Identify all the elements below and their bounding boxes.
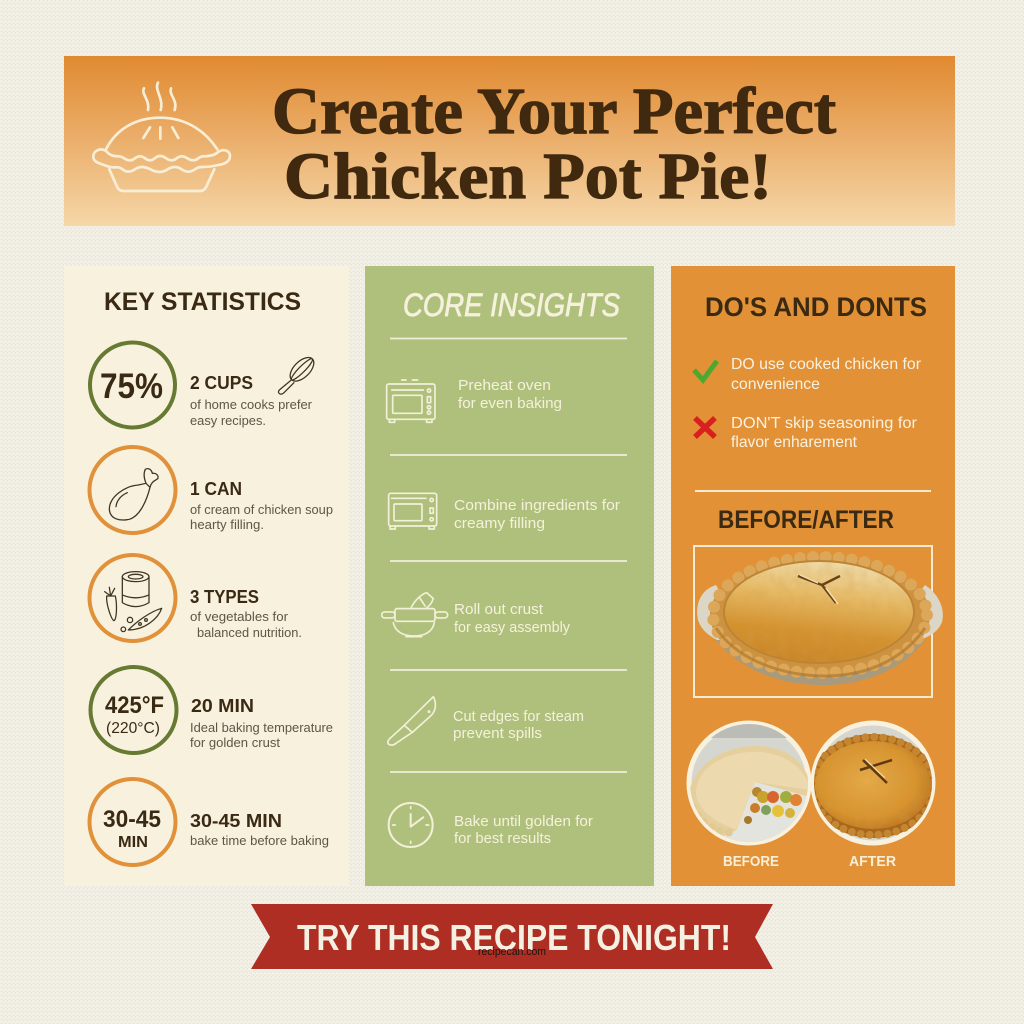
icon: rolling pin and bowl xyxy=(382,593,448,637)
insight: preheat oven: for even baking xyxy=(458,395,562,412)
insight: bake until golden xyxy=(389,803,593,847)
title: Create Your Perfect xyxy=(272,75,836,148)
heading: key statistics: KEY STATISTICS xyxy=(104,288,301,316)
stat: 30-45 min: 30-45 MIN xyxy=(190,811,282,831)
don't text: DON'T skip seasoning for xyxy=(731,415,918,432)
do text: DO use cooked chicken for xyxy=(731,356,922,373)
header banner xyxy=(64,56,955,226)
stat: 30-45 min: MIN xyxy=(118,834,148,851)
panel: do's and don'ts xyxy=(671,266,955,886)
stat: 425F: for golden crust xyxy=(190,736,281,750)
stat: 75% xyxy=(90,342,318,428)
icon: toaster oven xyxy=(389,493,437,529)
stat: 75%: of home cooks prefer xyxy=(190,398,312,412)
stat: 425F xyxy=(90,667,333,753)
panel: key statistics xyxy=(64,266,349,886)
heading: do's and donts: DO'S AND DONTS xyxy=(705,292,927,322)
stat: 75%: 2 CUPS xyxy=(190,373,253,393)
insight: cut edges xyxy=(388,697,584,745)
icon: cross mark xyxy=(695,418,715,437)
don't text: flavor enharement xyxy=(731,434,858,451)
insight: cut edges: Cut edges for steam xyxy=(453,708,584,725)
stat: 1 can: 1 CAN xyxy=(190,479,242,499)
heading: before/after: BEFORE/AFTER xyxy=(718,506,894,534)
insight: combine ingredients xyxy=(389,493,620,532)
image frame: finished pie xyxy=(694,546,943,697)
do text xyxy=(731,356,922,393)
icon: steaming pie xyxy=(93,83,230,191)
label: after: AFTER xyxy=(849,853,896,870)
stat: 3 types: balanced nutrition. xyxy=(197,626,302,640)
call to action ribbon: TRY THIS RECIPE TONIGHT! xyxy=(297,917,731,958)
icon: check mark xyxy=(694,361,717,380)
insight: roll out crust: Roll out crust xyxy=(454,601,544,618)
stat: 1 can: of cream of chicken soup xyxy=(190,503,333,517)
icon: can and vegetables xyxy=(105,572,162,632)
stat: 425F: Ideal baking temperature xyxy=(190,721,333,735)
watermark: recipecan.com xyxy=(478,946,546,958)
insight: bake until golden: for best results xyxy=(454,830,551,847)
stat: 30-45 min: 30-45 xyxy=(103,806,161,833)
icon: whisk xyxy=(278,353,318,394)
do text: convenience xyxy=(731,376,820,393)
insight: roll out crust: for easy assembly xyxy=(454,619,570,636)
insight: combine ingredients: Combine ingredients for xyxy=(454,497,620,514)
don't text xyxy=(731,415,918,451)
stat: 1 can: hearty filling. xyxy=(190,518,264,532)
insight: combine ingredients: creamy filling xyxy=(454,515,545,532)
stat: 30-45 min: bake time before baking xyxy=(190,834,329,848)
image: before pie xyxy=(688,722,812,850)
call to action ribbon xyxy=(251,904,773,969)
icon: knife xyxy=(388,697,435,745)
stat: 30-45 min xyxy=(90,779,329,865)
image: after pie xyxy=(809,723,937,843)
title: Chicken Pot Pie! xyxy=(284,140,772,213)
panel: core insights xyxy=(365,266,654,886)
stat: 75%: easy recipes. xyxy=(190,414,266,428)
insight: preheat oven xyxy=(387,377,562,422)
insight: preheat oven: Preheat oven xyxy=(458,377,551,394)
stat: 425F: 425°F xyxy=(105,692,164,719)
stat: 425F: 20 MIN xyxy=(191,696,254,716)
label: before: BEFORE xyxy=(723,853,779,870)
stat: 425F: (220°C) xyxy=(106,720,160,737)
title xyxy=(272,75,836,213)
stat: 3 types: 3 TYPES xyxy=(190,587,259,607)
stat: 3 types: of vegetables for xyxy=(190,610,288,624)
stat: 75%: 75% xyxy=(100,367,163,406)
icon: oven xyxy=(387,380,435,422)
insight: roll out crust xyxy=(382,593,570,637)
stat: 1 can xyxy=(90,447,333,533)
icon: clock xyxy=(389,803,433,847)
icon: chicken drumstick xyxy=(109,469,158,520)
insight: bake until golden: Bake until golden for xyxy=(454,813,593,830)
heading: core insights: CORE INSIGHTS xyxy=(403,287,620,323)
stat: 3 types xyxy=(90,555,302,641)
insight: cut edges: prevent spills xyxy=(453,725,542,742)
